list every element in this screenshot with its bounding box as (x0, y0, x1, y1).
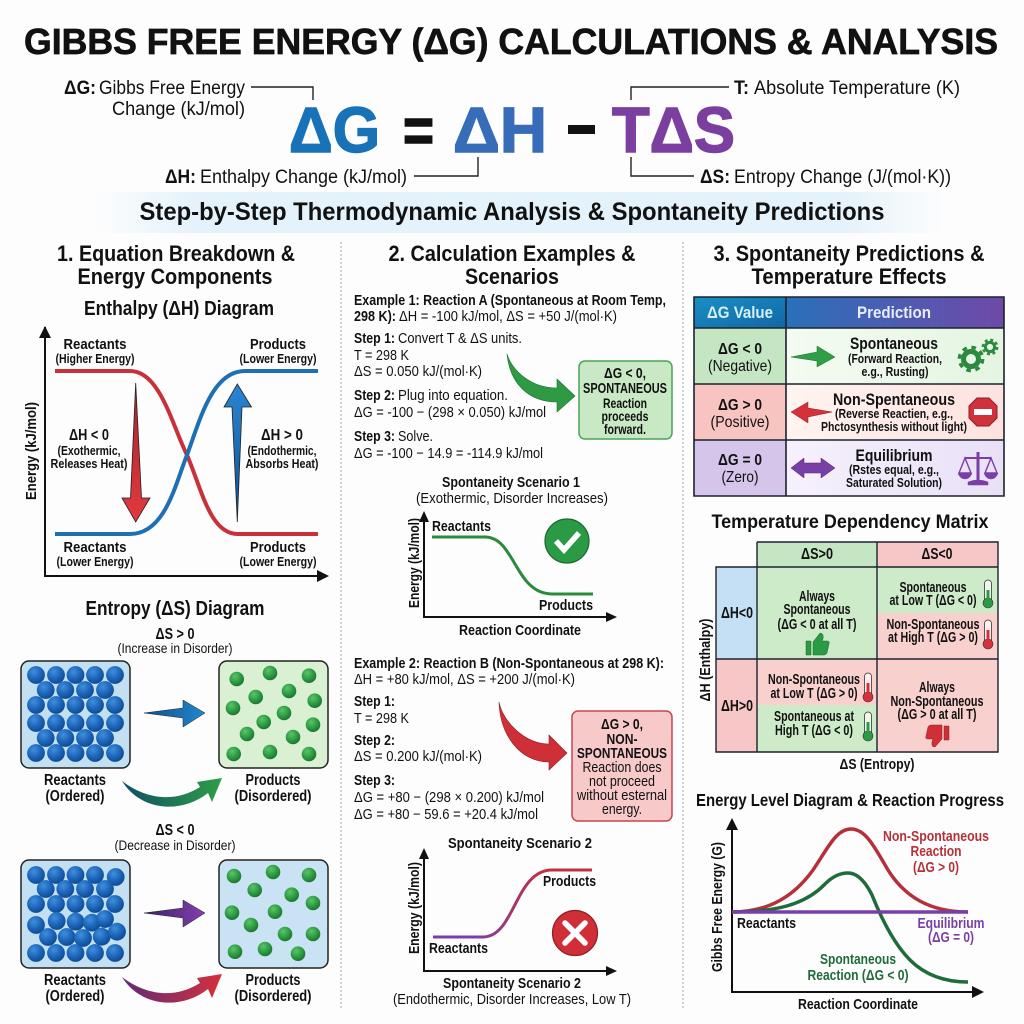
cell: always spontaneous (778, 589, 857, 655)
icon: check mark (545, 519, 589, 563)
chart: spontaneity scenario 2: Products (543, 874, 596, 890)
cell: always non-spontaneous: (ΔG > 0 at all T) (898, 707, 977, 723)
diagram: entropy increase (21, 626, 328, 807)
box: disordered products (219, 860, 328, 968)
label: delta H definition: Enthalpy Change (kJ/mol) (200, 167, 407, 188)
cell: always spontaneous: (ΔG < 0 at all T) (778, 617, 857, 633)
arrow: blue (144, 700, 205, 727)
arrow: red curved (499, 702, 567, 770)
text: example 1 steps: ΔG = -100 − 14.9 = -114.9 kJ/mol (354, 446, 543, 462)
text: example 1 steps: Step 3: (354, 429, 395, 445)
row: negative (708, 334, 997, 379)
text: example 1 steps: T = 298 K (354, 348, 409, 364)
callout: non-spontaneous: without esternal (576, 788, 667, 804)
cell: enthalpy negative entropy negative (886, 580, 993, 649)
cell: always non-spontaneous: Non-Spontaneous (890, 694, 984, 710)
row: negative: (Forward Reaction, (848, 351, 942, 366)
text: example 1 steps: Convert T & ΔS units. (398, 331, 522, 347)
chart: energy level reaction progress: Equilibrium (918, 915, 984, 932)
text: example 2 steps: ΔG = +80 − 59.6 = +20.4 kJ/mol (354, 807, 538, 823)
table: delta G prediction: ΔG Value (707, 303, 773, 322)
label: delta G definition: ΔG: (64, 78, 96, 99)
text: example 1 steps: Solve. (398, 429, 433, 445)
label: delta H definition: ΔH: (165, 167, 196, 188)
text: example 2 steps: ΔS = 0.200 kJ/(mol·K) (354, 749, 482, 765)
formula: Gibbs equation: ΔG (289, 94, 380, 166)
formula: Gibbs equation: TΔS (612, 94, 735, 166)
chart: spontaneity scenario 1: (Exothermic, Disorder Increases) (416, 490, 608, 507)
arrow: teal to green curved (122, 778, 222, 807)
heading: column 3: Temperature Effects (752, 264, 946, 289)
label: delta G definition: Change (kJ/mol) (112, 99, 245, 120)
text: example 1 steps: Example 1: Reaction A (Spontaneous at Room Temp, (354, 293, 666, 309)
icon: red thermometer (983, 620, 993, 649)
cell: always non-spontaneous: Always (919, 680, 955, 696)
title: GIBBS FREE ENERGY (ΔG) CALCULATIONS & ANALYSIS (24, 21, 998, 62)
chart: energy level reaction progress: Spontaneous (820, 951, 896, 968)
cell: enthalpy positive entropy positive: at Low T (ΔG > 0) (770, 686, 858, 702)
chart: energy level reaction progress: Reaction Coordinate (798, 996, 918, 1013)
text: example 1 steps: Plug into equation. (398, 388, 508, 404)
chart: spontaneity scenario 2 (393, 835, 631, 1008)
chart: spontaneity scenario 2: Energy (kJ/mol) (407, 862, 423, 954)
cell: enthalpy positive entropy positive: Non-Spontaneous (768, 672, 860, 688)
diagram: entropy increase: Products (246, 772, 300, 789)
subtitle band: Step-by-Step Thermodynamic Analysis & Spontaneity Predictions (140, 198, 884, 226)
diagram: entropy decrease: Products (246, 972, 300, 989)
label: temperature definition: T: (734, 78, 749, 99)
chart: enthalpy curves: Reactants (64, 539, 126, 556)
chart: enthalpy curves: ΔH > 0 (261, 427, 303, 444)
row: zero: (Zero) (722, 469, 758, 486)
row: zero: Equilibrium (856, 446, 932, 465)
callout: non-spontaneous: SPONTANEOUS (577, 745, 667, 762)
chart: spontaneity scenario 2: Reactants (429, 941, 488, 957)
chart: enthalpy curves: (Lower Energy) (240, 555, 316, 569)
chart: enthalpy curves (23, 326, 329, 582)
label: temperature definition: Absolute Temperature (K) (754, 78, 960, 99)
chart: spontaneity scenario 1: Reactants (432, 519, 491, 535)
diagram: entropy decrease: (Decrease in Disorder) (114, 837, 236, 853)
icon: green thermometer (983, 580, 993, 608)
heading: column 2: Scenarios (465, 264, 559, 289)
chart: enthalpy curves: (Lower Energy) (56, 555, 134, 569)
diagram: entropy increase: (Increase in Disorder) (118, 640, 232, 656)
chart: enthalpy curves: (Lower Energy) (240, 352, 316, 366)
diagram: entropy decrease: ΔS < 0 (156, 822, 195, 839)
text: example 2 steps: ΔG = +80 − (298 × 0.200) kJ/mol (354, 790, 544, 806)
arrow: purple to red curved (122, 974, 222, 1003)
cell: enthalpy negative entropy negative: at High T (ΔG > 0) (888, 630, 978, 646)
chart: energy level reaction progress (709, 818, 989, 1013)
callout: non-spontaneous: not proceed (589, 774, 655, 790)
row: zero: Saturated Solution) (846, 475, 942, 490)
callout: non-spontaneous: ΔG > 0, (601, 716, 643, 733)
chart: enthalpy curves: Energy (kJ/mol) (23, 402, 40, 500)
heading: column 1: 1. Equation Breakdown & (57, 241, 295, 266)
icon: green thermometer (863, 712, 873, 741)
row: positive: (Positive) (710, 414, 770, 431)
icon: thumbs down (926, 725, 949, 747)
heading: column 2 (388, 241, 636, 289)
formula: Gibbs equation: ΔH (453, 94, 547, 166)
chart: energy level reaction progress: Reactants (737, 916, 796, 932)
subtitle band (95, 192, 945, 233)
icon: balance scale (958, 452, 998, 485)
diagram: entropy decrease (21, 822, 328, 1005)
label: delta G definition: Gibbs Free Energy (99, 78, 245, 99)
chart: energy level reaction progress: (ΔG = 0) (928, 929, 974, 946)
matrix: temperature dependency: ΔH (Enthalpy) (697, 618, 714, 702)
matrix: temperature dependency: ΔH>0 (721, 698, 753, 715)
chart: enthalpy curves: Products (250, 336, 306, 353)
chart: energy level reaction progress: Gibbs Free Energy (G) (709, 842, 726, 972)
matrix: temperature dependency (697, 542, 998, 773)
chart: enthalpy curves: ΔH < 0 (69, 427, 109, 444)
heading: column 1: Energy Components (78, 264, 272, 289)
text: example 2 steps: T = 298 K (354, 711, 409, 727)
chart: enthalpy curves: Products (250, 539, 306, 556)
label: delta S definition (631, 157, 951, 188)
cell: always spontaneous: Spontaneous (784, 602, 850, 618)
matrix: temperature dependency: ΔS<0 (922, 546, 952, 563)
text: example 1 steps: ΔH = -100 kJ/mol, ΔS = +50 J/(mol·K) (399, 309, 617, 325)
heading: enthalpy diagram: Enthalpy (ΔH) Diagram (84, 298, 274, 320)
text: example 1 steps: Step 2: (354, 388, 395, 404)
text: example 1 steps: ΔS = 0.050 kJ/(mol·K) (354, 364, 482, 380)
label: delta G definition (64, 78, 313, 120)
cell: enthalpy negative entropy negative: Spontaneous (900, 580, 966, 596)
cell: enthalpy negative entropy negative: Non-Spontaneous (886, 617, 980, 633)
row: positive (710, 390, 997, 434)
chart: spontaneity scenario 2: Spontaneity Scenario 2 (443, 975, 581, 992)
text: example 2 steps: Step 3: (354, 773, 395, 789)
callout: spontaneous: forward. (604, 422, 646, 437)
text: example 1 steps: 298 K): (354, 309, 396, 325)
icon: thumbs up (806, 633, 829, 655)
panel: calculation examples (354, 241, 672, 1008)
chart: energy level reaction progress: (ΔG > 0) (913, 859, 959, 876)
arrow: purple (144, 900, 205, 927)
callout: non-spontaneous: NON- (606, 731, 638, 748)
text: example 1 steps: Step 1: (354, 331, 395, 347)
row: positive: (Reverse Reactien, e.g., (835, 406, 953, 421)
row: zero: ΔG = 0 (718, 452, 762, 469)
diagram: entropy increase: (Disordered) (234, 788, 312, 805)
row: negative: ΔG < 0 (718, 341, 762, 358)
table: delta G prediction: Prediction (857, 303, 931, 322)
callout: spontaneous: Reaction (603, 396, 647, 411)
cell: enthalpy positive entropy positive: High T (ΔG < 0) (775, 723, 853, 739)
label: delta S definition: Entropy Change (J/(mol·K)) (734, 167, 951, 188)
cell: enthalpy negative entropy negative: at Low T (ΔG < 0) (890, 593, 977, 609)
diagram: entropy decrease: (Ordered) (46, 988, 104, 1005)
heading: column 2: 2. Calculation Examples & (388, 241, 636, 266)
label: delta S definition: ΔS: (700, 167, 730, 188)
chart: spontaneity scenario 2: (Endothermic, Disorder Increases, Low T) (393, 991, 631, 1008)
text: example 2 steps: ΔH = +80 kJ/mol, ΔS = +200 J/(mol·K) (354, 672, 575, 688)
label: delta H definition (165, 157, 478, 188)
callout: spontaneous: ΔG < 0, (604, 365, 646, 382)
chart: spontaneity scenario 2: Spontaneity Scenario 2 (448, 835, 592, 852)
callout: non-spontaneous (572, 711, 672, 821)
row: negative: e.g., Rusting) (862, 364, 928, 379)
row: negative: (Negative) (708, 358, 772, 375)
box: disordered products (219, 661, 328, 768)
matrix: temperature dependency: ΔS>0 (801, 546, 833, 563)
text: example 2 steps: Step 2: (354, 733, 395, 749)
chart: energy level reaction progress: Reaction (910, 843, 962, 860)
text: example 2 steps (354, 656, 664, 823)
row: zero (718, 446, 998, 490)
chart: spontaneity scenario 1: Reaction Coordinate (459, 622, 581, 639)
label: temperature definition (631, 78, 960, 100)
formula: Gibbs equation (289, 94, 735, 166)
chart: enthalpy curves: Releases Heat) (50, 456, 128, 471)
chart: spontaneity scenario 1: Spontaneity Scenario 1 (442, 474, 580, 491)
box: ordered reactants (21, 860, 130, 968)
icon: gears (959, 340, 997, 371)
heading: column 3 (714, 241, 985, 289)
chart: spontaneity scenario 1: Energy (kJ/mol) (407, 518, 423, 608)
matrix: temperature dependency: ΔH<0 (721, 605, 753, 622)
icon: stop sign (969, 398, 997, 426)
callout: non-spontaneous: Reaction does (582, 760, 662, 776)
table: delta G prediction (694, 297, 1004, 496)
panel: equation breakdown (21, 241, 329, 1005)
callout: spontaneous (579, 361, 672, 439)
formula: Gibbs equation: = (403, 94, 434, 166)
chart: energy level reaction progress: Reaction (ΔG < 0) (808, 967, 909, 984)
chart: enthalpy curves: (Exothermic, (58, 443, 120, 458)
diagram: entropy decrease: Reactants (44, 972, 106, 989)
row: negative: Spontaneous (850, 334, 938, 353)
heading: column 3: 3. Spontaneity Predictions & (714, 241, 985, 266)
text: example 1 steps: ΔG = -100 − (298 × 0.050) kJ/mol (354, 405, 546, 421)
row: positive: Phctosynthesis without light) (821, 419, 967, 434)
chart: enthalpy curves: Absorbs Heat) (246, 456, 318, 471)
chart: energy level reaction progress: Non-Spontaneous (883, 828, 989, 845)
diagram: entropy increase: Reactants (44, 772, 106, 789)
heading: entropy diagram: Entropy (ΔS) Diagram (86, 598, 264, 620)
callout: spontaneous: SPONTANEOUS (583, 380, 667, 397)
icon: red thermometer (863, 673, 873, 702)
arrow: green curved (507, 354, 575, 412)
chart: enthalpy curves: (Endothermic, (248, 443, 316, 458)
text: example 2 steps: Step 1: (354, 694, 395, 710)
diagram: entropy increase: ΔS > 0 (156, 626, 195, 643)
callout: spontaneous: proceeds (602, 409, 648, 424)
matrix: temperature dependency: ΔS (Entropy) (840, 756, 914, 773)
diagram: entropy decrease: (Disordered) (234, 988, 312, 1005)
row: positive: Non-Spentaneous (833, 390, 955, 409)
row: zero: (Rstes equal, e.g., (849, 462, 939, 477)
icon: cross mark (552, 910, 598, 956)
box: ordered reactants (21, 661, 130, 768)
callout: non-spontaneous: energy. (602, 802, 642, 818)
chart: enthalpy curves: Reactants (64, 336, 126, 353)
heading: temperature matrix: Temperature Dependency Matrix (712, 512, 989, 533)
cell: always spontaneous: Always (799, 589, 835, 605)
cell: enthalpy positive entropy positive (768, 672, 873, 741)
heading: column 1 (57, 241, 295, 289)
panel: spontaneity predictions (694, 241, 1004, 1013)
chart: spontaneity scenario 1 (407, 474, 617, 639)
chart: spontaneity scenario 1: Products (539, 598, 593, 614)
cell: always non-spontaneous (890, 680, 984, 747)
chart: enthalpy curves: (Higher Energy) (56, 352, 134, 366)
text: example 1 steps (354, 293, 666, 462)
diagram: entropy increase: (Ordered) (46, 788, 104, 805)
cell: enthalpy positive entropy positive: Spontaneous at (774, 709, 854, 725)
text: example 2 steps: Example 2: Reaction B (Non-Spontaneous at 298 K): (354, 656, 664, 672)
row: positive: ΔG > 0 (718, 397, 762, 414)
